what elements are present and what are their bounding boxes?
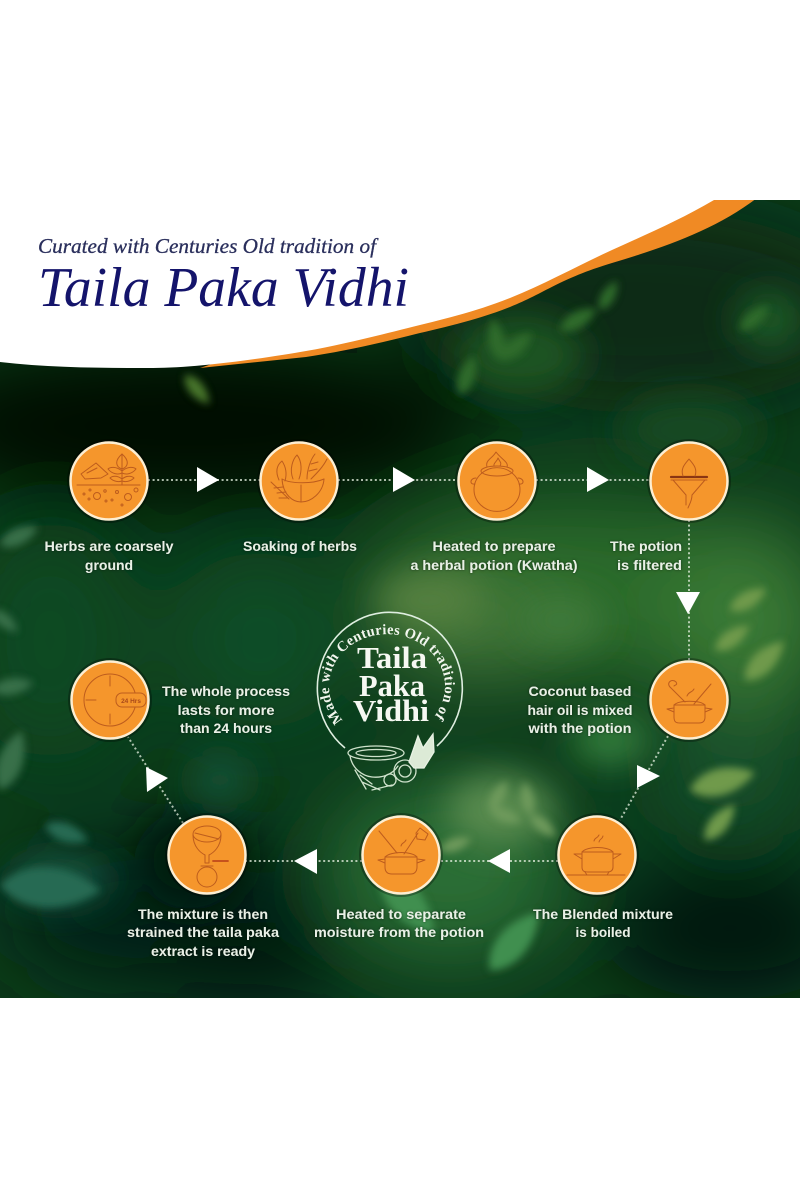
step 4 caption (610, 538, 682, 573)
step 9 icon: 24 hrs clock: 24 Hrs (121, 698, 141, 705)
arrow: step 3 to 4 (587, 467, 609, 492)
background: blurred foliage photo (0, 200, 800, 1005)
heading: small title line: Curated with Centuries Old tradition of (38, 234, 379, 258)
step 9 caption: than 24 hours (180, 720, 272, 736)
step 4 icon: funnel (647, 439, 731, 523)
step 8 caption: strained the taila paka (127, 924, 279, 940)
central badge: Made with Centuries Old tradition of Taila Paka Vidhi (316, 612, 464, 791)
step 3 caption: Heated to prepare (432, 538, 556, 554)
step 8 caption (127, 906, 279, 959)
step 2 icon: herbs in bowl (257, 439, 341, 523)
step 1 icon: herbs ground (67, 439, 151, 523)
step 9 caption: lasts for more (178, 702, 275, 718)
step 5 caption: hair oil is mixed (528, 702, 632, 718)
badge title: Vidhi (353, 693, 429, 728)
arrow: step 7 to 8 (294, 849, 317, 874)
step 6 caption (533, 906, 673, 940)
arrow: step 4 to 5 (676, 592, 700, 614)
step 2 caption: Soaking of herbs (243, 538, 357, 554)
step 8 caption: The mixture is then (138, 906, 268, 922)
step 9 caption: The whole process (162, 683, 290, 699)
arrow: step 6 to 7 (488, 849, 510, 873)
step 4 caption: is filtered (617, 557, 682, 573)
step 9 caption (162, 683, 290, 736)
step 5 caption: Coconut based (528, 683, 632, 699)
connector: dotted path between steps (128, 480, 689, 861)
step 6 caption: is boiled (576, 924, 630, 940)
step 1 caption: ground (85, 557, 133, 573)
step 5 caption (527, 683, 632, 736)
step 5 icon: mixing pot (647, 658, 731, 742)
page blank area below photo (0, 998, 800, 1200)
badge arc text: Made with Centuries Old tradition of (320, 624, 455, 726)
badge title: Paka (359, 668, 425, 703)
step 6 icon: boiling pot (555, 813, 639, 897)
step 1 caption: Herbs are coarsely (44, 538, 174, 554)
step 3 caption: a herbal potion (Kwatha) (410, 557, 578, 573)
step 7 caption: moisture from the potion (314, 924, 484, 940)
step 7 icon: heating pot with ladle (359, 813, 443, 897)
step 9 icon: 24 hrs clock (68, 658, 152, 742)
step 1 caption (44, 538, 174, 573)
step 8 icon: straining vessel (165, 813, 249, 897)
heading: main title: Taila Paka Vidhi (38, 257, 409, 319)
step 7 caption (314, 906, 484, 940)
arrow: step 2 to 3 (393, 467, 415, 492)
arrow: step 8 to 9 (146, 767, 168, 792)
step 3 caption (410, 538, 578, 573)
white header panel (0, 0, 800, 368)
arrow: step 5 to 6 (637, 765, 660, 788)
badge title (353, 640, 429, 728)
step 8 caption: extract is ready (151, 943, 255, 959)
orange swoosh (200, 198, 757, 368)
step 7 caption: Heated to separate (336, 906, 466, 922)
step 4 caption: The potion (610, 538, 682, 554)
step 6 caption: The Blended mixture (533, 906, 673, 922)
step 3 icon: pot over flame (455, 439, 539, 523)
badge title: Taila (357, 640, 428, 675)
arrow: step 1 to 2 (197, 467, 219, 492)
step 5 caption: with the potion (527, 720, 632, 736)
badge illustration: bowl with herbs (348, 734, 434, 790)
